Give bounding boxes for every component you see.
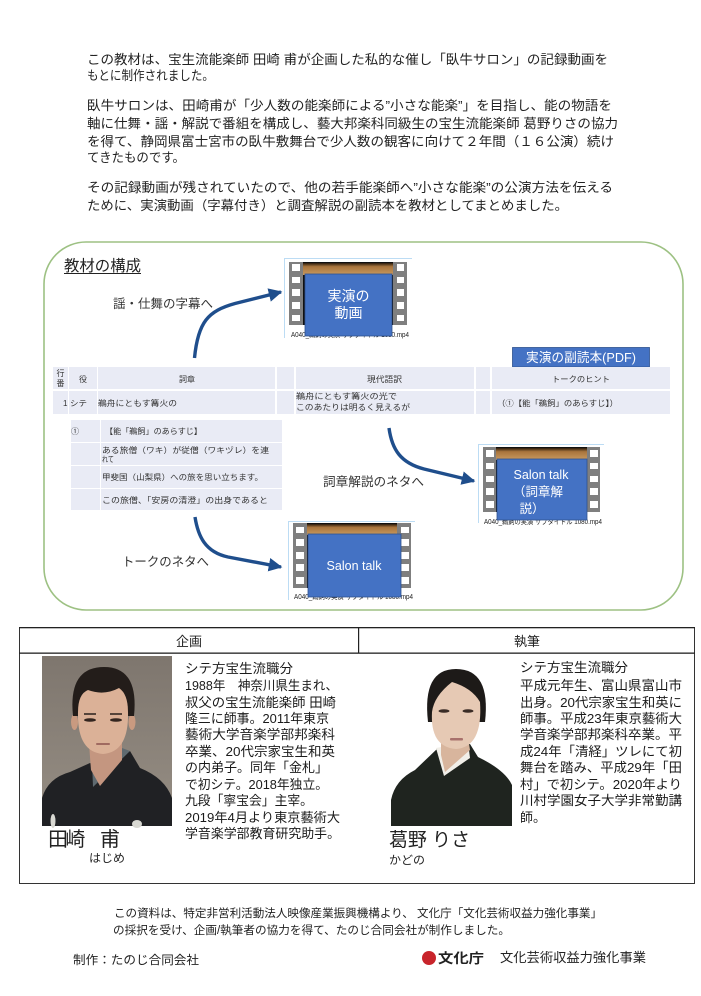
video thumbnail: salon talk: Salon talk [327,559,382,573]
bio: Kadono Risa: 師。 [520,810,546,825]
table: script rows: 行 [56,368,64,378]
name: Kadono Risa: 葛野 りさ [389,829,470,851]
bio: Kadono Risa: シテ方宝生流職分 [520,660,628,675]
name: Tasaki Hajime: 田崎 甫 [48,828,120,851]
intro text [87,52,618,213]
video thumbnail: performance: A040_鵜飼の実演 サブタイトル 1080.mp4 [291,330,409,339]
video thumbnail: salon talk commentary [478,444,604,526]
logo: Agency for Cultural Affairs: 文化庁 [438,950,484,966]
name: Tasaki Hajime: はじめ [89,852,125,865]
video thumbnail: salon talk commentary: A040_鵜飼の実演 サブタイトル 1080.mp4 [484,517,602,526]
bio: Kadono Risa: 成24年「清経」ツレにて初 [520,744,682,759]
footer note: の採択を受け、企画/執筆者の協力を得て、たのじ合同会社が制作しました。 [113,923,510,937]
producer credit: 制作：たのじ合同会社 [73,952,199,967]
photo: Tasaki Hajime [42,656,172,828]
panel: profiles table [19,627,695,884]
video thumbnail: salon talk [288,521,415,601]
footer note [113,906,602,937]
arrow: to performance video [194,292,281,358]
table: synopsis notes: 【能「鵜飼」のあらすじ】 [105,426,202,436]
name: Tasaki Hajime [48,828,125,865]
bio: Tasaki Hajime: シテ方宝生流職分 [185,661,293,676]
bio: Tasaki Hajime: 藝術大学音楽学部邦楽科 [185,727,335,742]
name: Kadono Risa [389,829,470,867]
bio: Kadono Risa: 川村学園女子大学非常勤講 [520,793,682,808]
intro text: を得て、静岡県富士宮市の臥牛敷舞台で少人数の観客に向けて２年間（１６公演）続け [87,134,614,149]
bio: Tasaki Hajime: 叔父の宝生流能楽師 田崎 [185,695,336,710]
table: synopsis notes: ある旅僧（ワキ）が従僧（ワキヅレ）を連 [102,445,269,455]
arrow: to talk video [195,517,281,567]
intro text: ために、実演動画（字幕付き）と調査解説の副読本を教材としてまとめました。 [87,198,568,213]
table: synopsis notes [71,420,282,510]
video thumbnail: salon talk commentary: （詞章解 [513,485,563,499]
table: script rows: 1 [63,399,68,408]
label: commentary material: 詞章解説のネタへ [323,474,424,489]
label: companion reader PDF [512,348,650,367]
bio: Kadono Risa: 平成元年生、富山県富山市 [520,678,682,693]
table: script rows: 現代語訳 [367,374,402,384]
bio: Tasaki Hajime: 九段「寧宝会」主宰。 [185,793,313,808]
table: script rows: このあたりは明るく見えるが [296,402,410,412]
logo: Agency for Cultural Affairs [422,950,646,966]
table: script rows [53,367,670,414]
bio: Kadono Risa: 村」で初シテ。2020年より [520,777,682,792]
intro text: もとに制作されました。 [87,68,214,83]
bio: Kadono Risa: 師事。平成23年東京藝術大 [520,711,682,726]
bio: Tasaki Hajime [185,661,340,841]
header: planning: 企画 [176,634,202,649]
bio: Tasaki Hajime: 隆三に師事。2011年東京 [185,711,329,726]
heading: structure: 教材の構成 [64,257,141,275]
table: synopsis notes: れて [102,455,114,464]
arrow: to commentary video [389,428,474,481]
intro text: てきたものです。 [87,150,185,165]
video thumbnail: performance: 実演の [328,288,370,304]
bio: Kadono Risa [520,660,682,825]
label: subtitles: 謡・仕舞の字幕へ [113,296,213,311]
intro text: この教材は、宝生流能楽師 田崎 甫が企画した私的な催し「臥牛サロン」の記録動画を [87,52,608,67]
table: script rows: 鵜舟にともす篝火の光で [296,391,397,401]
label: companion reader PDF: 実演の副読本(PDF) [526,350,636,365]
logo: Agency for Cultural Affairs: 文化芸術収益力強化事業 [500,950,646,965]
table: synopsis notes: ① [71,427,79,436]
footer note: この資料は、特定非営利活動法人映像産業振興機構より、 文化庁「文化芸術収益力強化事業」 [114,906,602,920]
bio: Tasaki Hajime: で初シテ。2018年独立。 [185,777,328,792]
bio: Kadono Risa: 舞台を踏み、平成29年「田 [520,760,682,775]
photo: Kadono Risa [391,669,512,826]
table: script rows: トークのヒント [552,375,610,384]
table: script rows: （①【能「鵜飼」のあらすじ】） [497,398,618,408]
panel: structure of the materials [44,242,683,610]
bio: Tasaki Hajime: 学音楽学部教育研究助手。 [185,826,340,841]
table: script rows: 鵜舟にともす篝火の [98,398,177,408]
table: synopsis notes: 甲斐国（山梨県）への旅を思い立ちます。 [102,472,263,482]
video thumbnail: performance: 動画 [334,305,362,321]
table: script rows: 役 [79,375,87,384]
bio: Tasaki Hajime: 2019年4月より東京藝術大 [185,810,340,825]
bio: Tasaki Hajime: 卒業、20代宗家宝生和英 [185,744,335,759]
table: script rows: シテ [70,399,87,408]
table: script rows: 番 [56,378,64,388]
intro text: 軸に仕舞・謡・解説で番組を構成し、藝大邦楽科同級生の宝生流能楽師 葛野りさの協力 [87,116,618,131]
bio: Tasaki Hajime: の内弟子。同年「金札」 [185,760,328,775]
table: script rows: 詞章 [179,374,195,384]
table: synopsis notes: この旅僧、「安房の清澄」の出身であると [102,495,268,505]
video thumbnail: salon talk: A040_鵜飼の実演 サブタイトル 1080.mp4 [294,592,413,601]
video thumbnail: salon talk commentary: Salon talk [514,468,569,482]
bio: Tasaki Hajime: 1988年 神奈川県生まれ、 [185,678,338,693]
bio: Kadono Risa: 学音楽学部邦楽科卒業。平 [520,727,682,742]
video thumbnail: performance [284,258,412,339]
bio: Kadono Risa: 出身。20代宗家宝生和英に [520,695,682,710]
intro text: 臥牛サロンは、田崎甫が「少人数の能楽師による”小さな能楽”」を目指し、能の物語を [87,98,612,113]
video thumbnail: salon talk commentary: 説） [519,501,545,516]
header: writing: 執筆 [514,634,540,649]
intro text: その記録動画が残されていたので、他の若手能楽師へ”小さな能楽”の公演方法を伝える [87,180,613,195]
label: talk material: トークのネタへ [122,555,209,569]
name: Kadono Risa: かどの [389,854,425,867]
